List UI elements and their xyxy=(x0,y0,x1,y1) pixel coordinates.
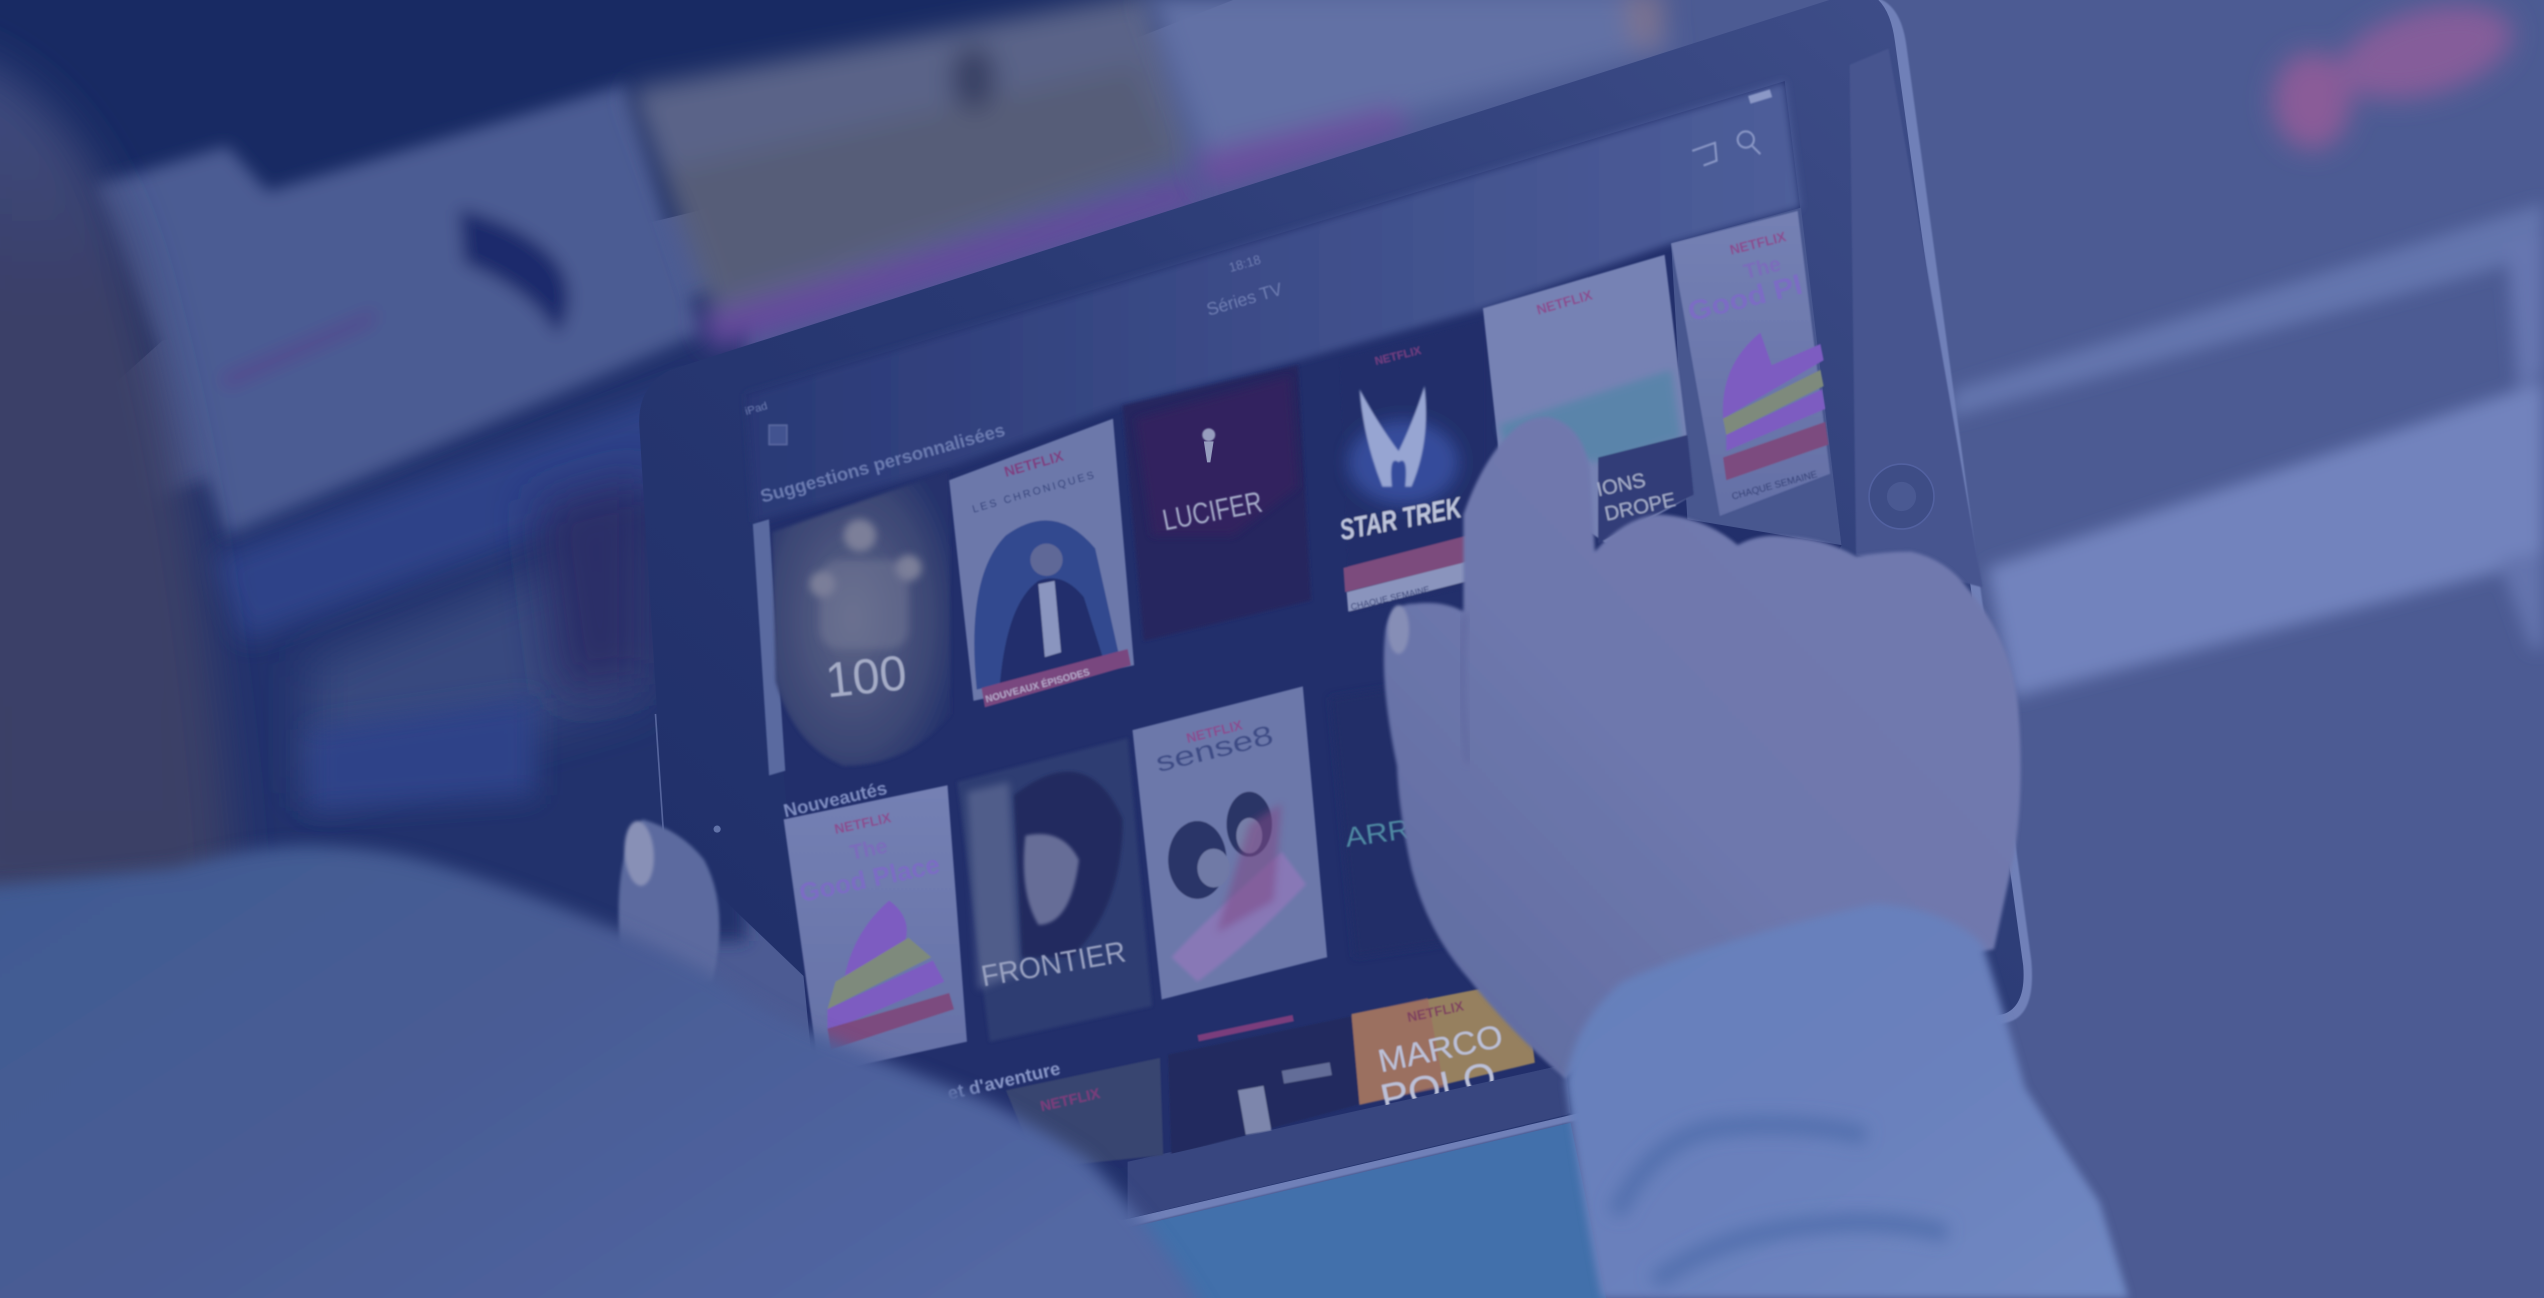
poster: landscape nations: IONS xyxy=(1595,470,1648,501)
finger nail xyxy=(1388,605,1409,654)
poster: Frontier xyxy=(957,738,1152,1042)
side strip poster xyxy=(753,519,785,776)
sleeve folds xyxy=(1616,1125,1947,1282)
blurred top right poster xyxy=(1144,0,1671,191)
poster: Star Trek: STAR TREK xyxy=(1337,492,1466,547)
poster: The 100 xyxy=(772,471,951,766)
tablet xyxy=(639,0,2032,1228)
finger shadow xyxy=(1462,613,1468,763)
blurred red sign xyxy=(2273,0,2523,149)
poster: Star Trek xyxy=(1337,321,1485,613)
blue table under tablet xyxy=(1128,1123,1606,1298)
blurred right stripes xyxy=(1947,203,2544,698)
poster: The Good Place top: CHAQUE SEMAINE xyxy=(1731,469,1819,503)
shoulder and arm xyxy=(0,845,1217,1298)
thumb nail xyxy=(622,820,656,887)
poster: The Good Place top: NETFLIX xyxy=(1728,229,1788,258)
home button xyxy=(1869,464,1934,529)
poster: The Good Place top: Good Pl xyxy=(1685,269,1805,327)
tablet body xyxy=(639,0,2024,1220)
poster: landscape nations xyxy=(1483,255,1694,544)
app title: Séries TV xyxy=(1204,279,1285,320)
right hand xyxy=(1384,417,2021,1079)
status and header icons xyxy=(769,89,1772,445)
poster: Arrow xyxy=(1330,681,1460,957)
screen xyxy=(746,81,1841,1168)
poster: Star Trek: NETFLIX xyxy=(1374,345,1423,368)
left side rim xyxy=(655,714,664,836)
sleeve xyxy=(1566,904,2129,1298)
poster: Marco Polo xyxy=(1352,980,1535,1122)
poster: Lucifer: LUCIFER xyxy=(1160,487,1265,537)
screen header xyxy=(746,81,1801,522)
poster: Les Chroniques: NETFLIX xyxy=(1003,449,1066,481)
poster: The Good Place bottom: NETFLIX xyxy=(833,810,893,837)
bottom row posters xyxy=(1006,980,1535,1168)
right bezel light area xyxy=(1850,49,1983,587)
poster: The Good Place bottom xyxy=(784,785,967,1074)
poster: Sense8 xyxy=(1132,686,1327,999)
poster: Sense8: NETFLIX xyxy=(1185,717,1245,746)
poster: Marco Polo: NETFLIX xyxy=(1406,998,1466,1025)
row label: action: et d'aventure xyxy=(945,1058,1062,1104)
row label: suggestions: Suggestions personnalisées xyxy=(758,419,1007,507)
poster: Marco Polo: POLO xyxy=(1376,1053,1500,1122)
poster: landscape nations: NETFLIX xyxy=(1535,287,1595,318)
app title: iPad xyxy=(744,400,769,418)
left hand thumb xyxy=(619,819,720,990)
tablet silver rim xyxy=(1103,0,2032,1228)
blurred hair on left xyxy=(0,49,235,909)
tablet mic dot xyxy=(714,826,721,833)
poster: The Good Place bottom: Good Place xyxy=(797,851,942,908)
poster: Star Trek: CHAQUE SEMAINE xyxy=(1350,584,1431,612)
app title xyxy=(744,252,1285,418)
app title: 18:18 xyxy=(1227,252,1262,275)
blurred white card xyxy=(92,84,701,535)
poster: Les Chroniques: NOUVEAUX ÉPISODES xyxy=(984,667,1092,705)
poster: Marco Polo: MARCO xyxy=(1375,1018,1506,1079)
blurred top poster xyxy=(630,0,1201,349)
bottom bezel strip xyxy=(1128,1064,1571,1217)
poster: Lucifer xyxy=(1123,365,1311,641)
poster: Sense8: sense8 xyxy=(1152,719,1276,778)
poster: The 100: 100 xyxy=(823,646,909,709)
dark upper-left wall xyxy=(0,0,1233,487)
poster: landscape nations: DROPE xyxy=(1603,489,1678,526)
poster: Frontier: FRONTIER xyxy=(979,937,1128,993)
hand shape xyxy=(1384,417,2021,1079)
lower shelf area xyxy=(97,276,746,941)
bottom row posters: NETFLIX xyxy=(1039,1086,1102,1115)
poster: Les Chroniques: LES CHRONIQUES xyxy=(971,469,1098,516)
poster: The Good Place top: The xyxy=(1741,253,1783,284)
poster: The Good Place top xyxy=(1671,211,1830,516)
poster: Arrow: ARR xyxy=(1343,813,1412,853)
poster: Les Chroniques xyxy=(949,419,1134,707)
row label: new: Nouveautés xyxy=(781,777,889,822)
poster: The Good Place bottom: The xyxy=(848,835,889,865)
cover for lower screen clip xyxy=(1128,1064,1567,1218)
